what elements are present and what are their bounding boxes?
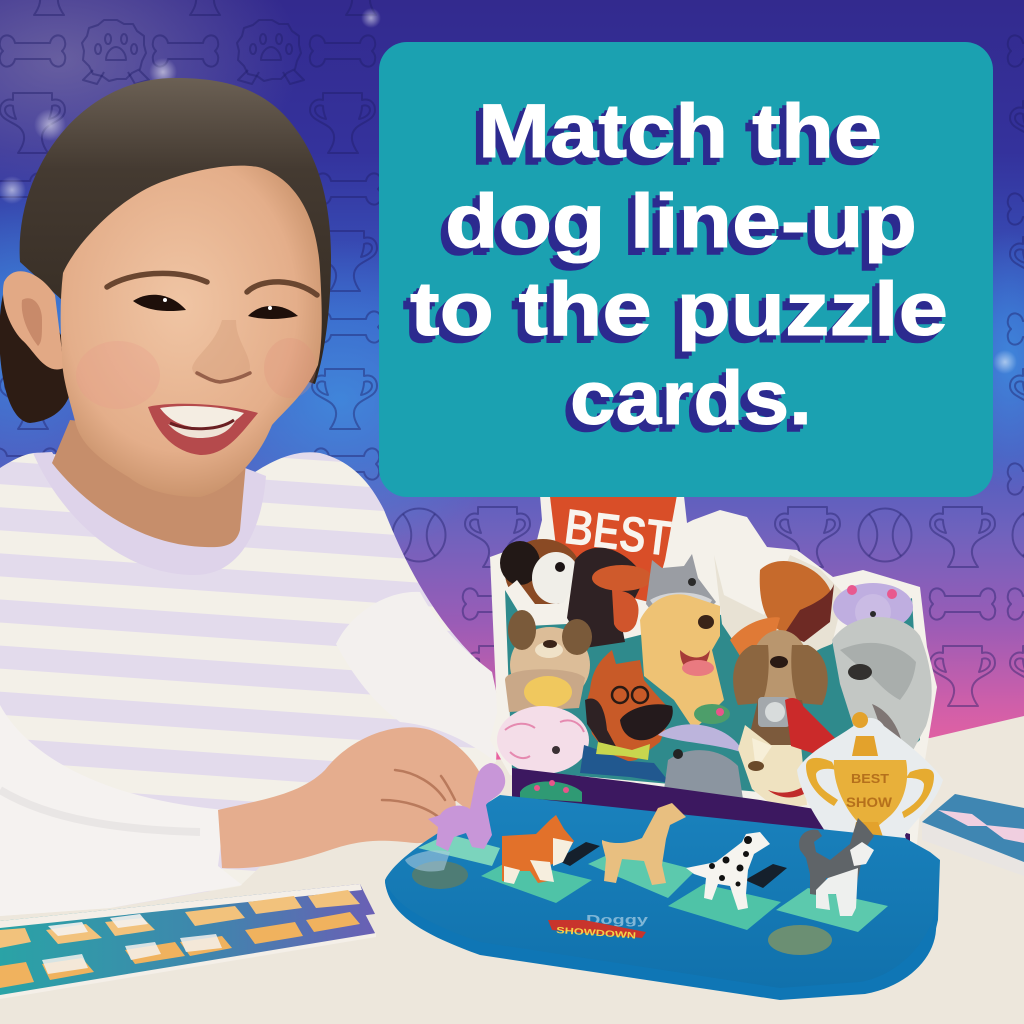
hand [218, 727, 488, 868]
headline: cards. [570, 356, 812, 441]
headline shadow: cards. [566, 360, 808, 445]
headline panel [379, 42, 993, 497]
background icon pattern [0, 0, 1024, 706]
dog figures [428, 763, 874, 916]
puzzle card strips [0, 884, 376, 999]
headline shadow: cards. [563, 363, 805, 448]
logo: SHOWDOWN [556, 925, 636, 941]
platforms [418, 834, 500, 866]
eyebrows [107, 273, 207, 287]
headline: Match the [478, 89, 882, 174]
game backdrop [490, 470, 943, 876]
board highlight [405, 850, 450, 872]
neck [52, 420, 248, 547]
trophy [806, 712, 934, 866]
nose [192, 320, 250, 383]
trophy card [797, 718, 943, 876]
headline shadow: Match the [471, 96, 875, 181]
card outline [490, 470, 937, 875]
headline: dog line-up [445, 179, 917, 264]
background [0, 0, 1024, 760]
table [0, 716, 1024, 1024]
card deck [922, 794, 1024, 876]
sparkles [0, 8, 1017, 374]
trophy: BEST [851, 771, 889, 786]
sweater body [0, 452, 498, 916]
face [61, 166, 322, 497]
eyes [133, 295, 186, 311]
hair bun [0, 285, 74, 423]
girl [0, 78, 498, 916]
right sleeve cuff [336, 592, 498, 762]
hair [20, 78, 331, 384]
mouth [148, 404, 258, 455]
retriever [602, 803, 686, 885]
logo: Doggy [586, 912, 649, 927]
headline shadow [403, 93, 944, 448]
collar [33, 452, 266, 575]
purple curtain [512, 768, 910, 862]
husky [799, 818, 874, 916]
headline shadow: dog line-up [438, 186, 910, 271]
headline shadow: to the puzzle [406, 271, 944, 356]
poodle [428, 763, 505, 851]
dalmatian [686, 832, 770, 910]
left sleeve [0, 705, 242, 916]
bushes [412, 861, 468, 889]
best sign [548, 480, 677, 603]
cheeks [76, 341, 160, 409]
teal seats [505, 590, 920, 800]
cartoon dogs [500, 539, 589, 626]
game board [385, 795, 940, 1000]
headline shadow: to the puzzle [403, 274, 941, 359]
ear [3, 271, 64, 370]
slots [556, 842, 787, 888]
best text: BEST [562, 498, 674, 567]
red pennant [785, 698, 837, 754]
headline: to the puzzle [410, 267, 948, 352]
corgi [502, 815, 574, 884]
trophy: SHOW [846, 794, 893, 810]
headline shadow: dog line-up [441, 183, 913, 268]
headline shadow: Match the [474, 93, 878, 178]
logo [548, 912, 649, 941]
headline [410, 89, 948, 441]
